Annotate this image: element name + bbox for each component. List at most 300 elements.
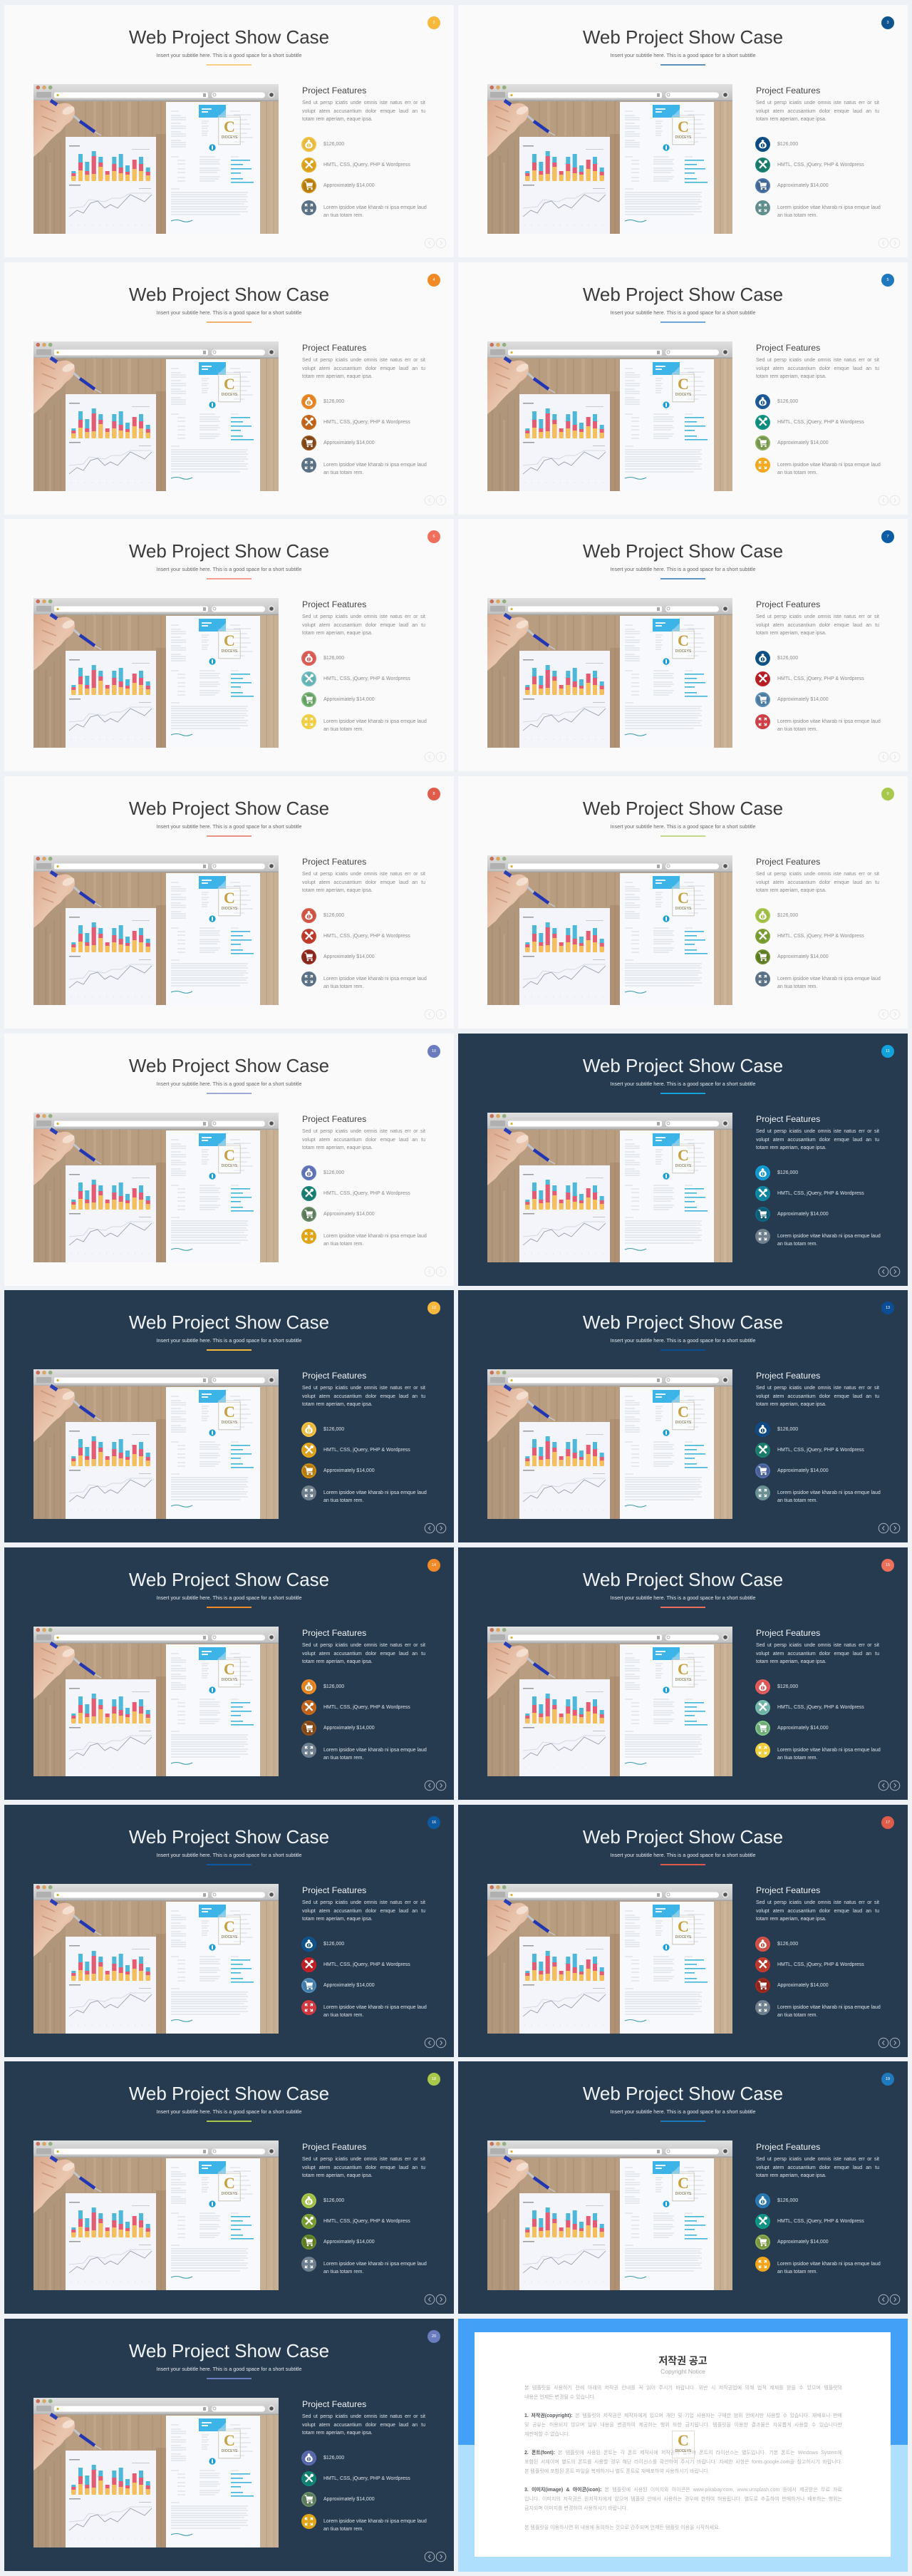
feature: budget: $126,000	[777, 1427, 798, 1432]
page number badge	[428, 1045, 440, 1058]
features paragraph: totam rem aperiam, eaque ipsa.	[302, 117, 373, 122]
page number badge	[881, 788, 894, 800]
section 1 line 3: 재판매할 수 없습니다.	[524, 2432, 570, 2437]
browser mockup image	[33, 2398, 279, 2547]
feature: technologies: HMTL, CSS, jQuery, PHP & Wordpress	[323, 420, 410, 425]
slide 7: light navy red	[458, 519, 908, 771]
subtitle: Insert your subtitle here. This is a good space for a short subtitle	[156, 1852, 302, 1858]
section 1 line 1: 1. 저작권(copyright): 본 템플릿의 저작권은 제작자에게 있으며 개인 및 기업 사용자는 구매한 범위 안에서만 사용할 수 있습니다. 재배포나 판매	[524, 2413, 842, 2418]
section 3 line 3: 금지되며 이미지를 변경하여 사용하시기 바랍니다.	[524, 2506, 628, 2511]
features paragraph	[302, 358, 425, 379]
page number badge	[428, 274, 440, 287]
navigation arrows	[878, 1780, 901, 1791]
feature: description: Lorem ipsidoe vitae kharab ni ipsa emque laud	[777, 463, 881, 468]
accent underline	[207, 835, 252, 837]
features heading: Project Features	[756, 1371, 820, 1381]
slide 15: dark coral	[458, 1547, 908, 1800]
page number badge: 8	[432, 792, 435, 796]
feature: description	[301, 2257, 431, 2272]
watermark logo: DIOCEYS	[222, 135, 237, 140]
features paragraph: volupt atem accusantium dolor emque laud an tu	[756, 108, 879, 114]
page number badge	[428, 1302, 440, 1314]
feature: technologies: HMTL, CSS, jQuery, PHP & Wordpress	[777, 420, 864, 425]
feature list	[755, 394, 881, 475]
features heading: Project Features	[302, 857, 366, 867]
feature: approximate cost	[755, 1978, 885, 1993]
title: Web Project Show Case	[129, 26, 329, 48]
feature: approximate cost: Approximately $14,000	[777, 1212, 829, 1217]
page number badge	[881, 1045, 894, 1058]
page number badge: 13	[886, 1306, 890, 1310]
features paragraph: Sed ut persp iciatis unde omnis iste natus err or sit	[302, 2157, 425, 2162]
feature: budget: $126,000	[777, 2198, 798, 2203]
feature list	[301, 908, 431, 988]
feature: budget	[301, 1422, 431, 1437]
page number badge: 16	[432, 1820, 436, 1825]
page number badge: 18	[432, 2077, 436, 2081]
watermark logo	[672, 374, 695, 402]
features heading: Project Features	[756, 1885, 820, 1895]
navigation arrows	[425, 495, 446, 506]
feature: approximate cost: Approximately $14,000	[777, 954, 829, 959]
title: Web Project Show Case	[129, 284, 329, 305]
feature: description	[755, 2257, 885, 2272]
page number badge: 19	[886, 2077, 890, 2081]
slide 13: dark navy	[458, 1290, 908, 1542]
subtitle: Insert your subtitle here. This is a good space for a short subtitle	[610, 566, 756, 572]
subtitle: Insert your subtitle here. This is a good space for a short subtitle	[156, 823, 302, 830]
title: Web Project Show Case	[129, 1312, 329, 1333]
title: Web Project Show Case	[583, 1569, 783, 1590]
features heading: Project Features	[302, 1371, 366, 1381]
accent underline	[660, 321, 705, 323]
feature: technologies: HMTL, CSS, jQuery, PHP & Wordpress	[323, 1191, 410, 1196]
slide 14: dark orange	[4, 1547, 454, 1800]
feature: technologies	[301, 1957, 431, 1972]
feature list	[301, 1165, 431, 1245]
subtitle: Insert your subtitle here. This is a good space for a short subtitle	[156, 2366, 302, 2372]
watermark logo	[218, 888, 241, 916]
features paragraph: totam rem aperiam, eaque ipsa.	[756, 2173, 826, 2178]
title: Web Project Show Case	[583, 1826, 783, 1848]
feature: description	[755, 1743, 885, 1758]
features heading: Project Features	[756, 343, 820, 353]
browser mockup image	[487, 855, 732, 1005]
intro text: 본 템플릿을 사용하기 전에 아래의 저작권 안내를 꼭 읽어 주시기 바랍니다. 위반 시 저작권법에 의해 법적 제재를 받을 수 있으며 템플릿의	[524, 2386, 842, 2391]
navigation arrows	[878, 2037, 901, 2049]
features paragraph	[756, 1384, 879, 1408]
feature: budget	[755, 1679, 885, 1694]
browser mockup image	[33, 341, 279, 491]
title: Web Project Show Case	[129, 1055, 329, 1076]
watermark logo: DIOCEYS	[675, 649, 691, 654]
watermark logo: C	[224, 1403, 235, 1421]
navigation arrows	[878, 1523, 901, 1534]
feature: budget	[301, 1165, 431, 1180]
slide 2: light yellow	[4, 5, 454, 257]
feature: budget	[301, 908, 431, 923]
subtitle: Insert your subtitle here. This is a good space for a short subtitle	[610, 52, 756, 58]
feature: budget	[755, 394, 798, 409]
watermark logo	[672, 631, 695, 659]
features paragraph: totam rem aperiam, eaque ipsa.	[302, 374, 373, 379]
feature: approximate cost: Approximately $14,000	[777, 1726, 829, 1731]
feature: description	[755, 1485, 885, 1500]
page number badge: 4	[432, 278, 435, 282]
feature: budget: $126,000	[323, 2198, 344, 2203]
accent underline	[660, 2121, 705, 2122]
feature: budget	[755, 2193, 885, 2208]
page number badge: 2	[432, 21, 435, 25]
feature: budget: $126,000	[323, 1684, 344, 1689]
feature: approximate cost	[755, 949, 885, 964]
feature: approximate cost: Approximately $14,000	[323, 441, 375, 445]
features paragraph: volupt atem accusantium dolor emque laud an tu	[756, 1138, 879, 1142]
features paragraph: totam rem aperiam, eaque ipsa.	[302, 1659, 373, 1664]
section 3 line 2: 입니다. 이미지의 저작권은 원저작자에게 있으며 템플릿 안에서 사용하는 경우에 한하여 허용됩니다. 별도로 추출하여 판매하거나 배포하는 행위는	[524, 2497, 842, 2502]
features heading: Project Features	[302, 1628, 366, 1638]
features paragraph: volupt atem accusantium dolor emque laud an tu	[302, 880, 425, 885]
feature list	[755, 1422, 885, 1502]
watermark logo	[218, 1402, 241, 1430]
features paragraph: volupt atem accusantium dolor emque laud an tu	[756, 366, 879, 371]
navigation arrows	[424, 2294, 447, 2305]
page number badge: 7	[886, 535, 889, 539]
feature list: an tiua totam rem.	[323, 1498, 363, 1503]
watermark logo: C	[678, 118, 689, 135]
feature: description	[301, 2000, 431, 2015]
feature list	[755, 1679, 885, 1759]
watermark logo	[672, 117, 695, 145]
browser mockup image	[487, 1627, 732, 1776]
feature: description	[755, 458, 881, 475]
watermark logo: DIOCEYS	[675, 907, 691, 911]
features paragraph: volupt atem accusantium dolor emque laud an tu	[302, 2422, 425, 2428]
feature list: an tiua totam rem.	[323, 984, 363, 989]
watermark logo: DIOCEYS	[675, 1421, 691, 1425]
navigation arrows	[424, 2037, 447, 2049]
features heading: Project Features	[756, 599, 820, 609]
feature: approximate cost	[301, 1978, 431, 1993]
title: Web Project Show Case	[583, 1055, 783, 1076]
page number badge	[881, 274, 894, 287]
features paragraph: totam rem aperiam, eaque ipsa.	[302, 2173, 373, 2178]
browser mockup image	[33, 855, 279, 1005]
watermark logo: DIOCEYS	[222, 2192, 237, 2196]
subtitle: Insert your subtitle here. This is a good space for a short subtitle	[156, 309, 302, 316]
features heading: Project Features	[302, 1114, 366, 1124]
feature: budget: $126,000	[323, 913, 344, 918]
watermark logo	[218, 1659, 241, 1687]
watermark logo: DIOCEYS	[675, 1164, 691, 1168]
feature list: an tiua totam rem.	[777, 1498, 817, 1503]
notice heading: 저작권 공고	[658, 2355, 708, 2366]
watermark logo: C	[224, 889, 235, 907]
features paragraph: volupt atem accusantium dolor emque laud an tu	[756, 2165, 879, 2170]
feature: technologies: HMTL, CSS, jQuery, PHP & Wordpress	[777, 676, 864, 681]
feature: technologies	[301, 1700, 431, 1715]
feature: budget	[755, 651, 885, 666]
feature: approximate cost: Approximately $14,000	[777, 183, 829, 188]
feature: technologies	[301, 1186, 431, 1201]
watermark logo	[672, 2173, 695, 2201]
features paragraph: totam rem aperiam, eaque ipsa.	[302, 1402, 373, 1407]
accent underline	[207, 321, 252, 323]
feature: description: Lorem ipsidoe vitae kharab ni ipsa emque laud	[777, 2005, 881, 2010]
features paragraph: Sed ut persp iciatis unde omnis iste natus err or sit	[756, 358, 879, 363]
subtitle: Insert your subtitle here. This is a good space for a short subtitle	[610, 2108, 756, 2115]
feature list: an tiua totam rem.	[323, 2527, 363, 2532]
feature list	[301, 1937, 431, 2016]
feature: approximate cost	[301, 1207, 431, 1222]
feature list	[301, 2193, 431, 2273]
feature: budget: $126,000	[777, 913, 798, 918]
watermark logo: C	[224, 1146, 235, 1164]
features paragraph: totam rem aperiam, eaque ipsa.	[756, 1145, 826, 1150]
subtitle: Insert your subtitle here. This is a good space for a short subtitle	[156, 566, 302, 572]
feature: description	[301, 200, 427, 218]
feature: technologies: HMTL, CSS, jQuery, PHP & Wordpress	[323, 1705, 410, 1710]
title: Web Project Show Case	[129, 540, 329, 562]
feature: technologies: HMTL, CSS, jQuery, PHP & Wordpress	[323, 2219, 410, 2224]
feature: budget: $126,000	[777, 142, 798, 147]
feature: technologies	[755, 1186, 885, 1201]
watermark logo	[672, 1145, 695, 1173]
watermark logo	[218, 1917, 241, 1944]
feature: description: Lorem ipsidoe vitae kharab ni ipsa emque laud	[323, 205, 427, 210]
title: Web Project Show Case	[583, 540, 783, 562]
page number badge	[428, 2330, 440, 2343]
page number badge: 17	[886, 1820, 890, 1825]
features heading: Project Features	[756, 86, 820, 96]
page number badge	[881, 1816, 894, 1829]
feature: budget: $126,000	[323, 142, 344, 147]
feature: budget	[301, 137, 344, 152]
accent underline	[660, 64, 705, 66]
feature: technologies	[301, 2471, 431, 2486]
accent underline	[660, 1607, 705, 1608]
feature list	[301, 651, 427, 732]
watermark logo	[218, 117, 241, 145]
feature: approximate cost: Approximately $14,000	[323, 1983, 375, 1988]
title: Web Project Show Case	[129, 2340, 329, 2361]
page number badge	[428, 1559, 440, 1572]
features paragraph: Sed ut persp iciatis unde omnis iste natus err or sit	[756, 1643, 879, 1648]
feature: approximate cost: Approximately $14,000	[777, 1468, 829, 1473]
watermark logo: DIOCEYS	[222, 1164, 237, 1168]
watermark logo: C	[678, 1917, 689, 1935]
features heading: Project Features	[302, 86, 366, 96]
accent underline	[207, 1349, 252, 1351]
features paragraph: volupt atem accusantium dolor emque laud an tu	[756, 880, 879, 885]
subtitle: Insert your subtitle here. This is a good space for a short subtitle	[156, 2108, 302, 2115]
feature: description	[755, 2000, 885, 2015]
watermark logo	[218, 1145, 241, 1173]
features paragraph: totam rem aperiam, eaque ipsa.	[302, 888, 373, 893]
navigation arrows	[424, 1780, 447, 1791]
section 3 line 1: 3. 이미지(image) & 아이콘(icon): 본 템플릿에 사용된 이미지와 아이콘은 www.pixabay.com, www.unsplash.com 등에서 제공받은 무료 자료	[524, 2488, 842, 2493]
page number badge	[428, 1816, 440, 1829]
features heading: Project Features	[302, 599, 366, 609]
feature list	[301, 394, 427, 475]
accent underline	[660, 578, 705, 579]
features paragraph	[302, 100, 425, 122]
subtitle: Insert your subtitle here. This is a good space for a short subtitle	[156, 1337, 302, 1344]
features paragraph: volupt atem accusantium dolor emque laud an tu	[302, 366, 425, 371]
feature: budget: $126,000	[323, 1942, 344, 1947]
feature: description: Lorem ipsidoe vitae kharab ni ipsa emque laud	[323, 2005, 427, 2010]
intro text line 2: 내용은 언제든 변경될 수 있습니다.	[524, 2395, 596, 2400]
feature: approximate cost: Approximately $14,000	[777, 1983, 829, 1988]
browser mockup image	[487, 84, 732, 234]
features heading: Project Features	[302, 2399, 366, 2409]
feature: description	[301, 1743, 431, 1758]
features heading: Project Features	[756, 1114, 820, 1124]
features paragraph	[302, 1384, 425, 1408]
features heading: Project Features	[302, 1885, 366, 1895]
features paragraph	[302, 2413, 425, 2438]
subtitle: Insert your subtitle here. This is a good space for a short subtitle	[610, 823, 756, 830]
features paragraph	[302, 2155, 425, 2180]
features paragraph: totam rem aperiam, eaque ipsa.	[756, 1659, 826, 1664]
feature: technologies: HMTL, CSS, jQuery, PHP & Wordpress	[323, 676, 410, 681]
feature list	[755, 137, 881, 218]
watermark logo	[218, 2431, 241, 2458]
page number badge: 10	[432, 1049, 436, 1053]
features paragraph: Sed ut persp iciatis unde omnis iste natus err or sit	[302, 1129, 425, 1134]
features paragraph: volupt atem accusantium dolor emque laud an tu	[302, 623, 425, 627]
feature: technologies: HMTL, CSS, jQuery, PHP & Wordpress	[777, 1705, 864, 1710]
features paragraph: totam rem aperiam, eaque ipsa.	[756, 1402, 826, 1407]
section 2 line 1: 2. 폰트(font): 본 템플릿에 사용된 폰트는 각 폰트 제작사에 저작권이 있으며 폰트의 라이선스는 별도입니다. 기본 폰트는 Windows System에	[524, 2451, 842, 2456]
feature: budget	[301, 2451, 431, 2466]
accent underline	[660, 1093, 705, 1094]
watermark logo	[672, 888, 695, 916]
navigation arrows	[878, 2294, 901, 2305]
closing text: 본 템플릿을 이용하시면 위 내용에 동의하는 것으로 간주되며 언제든 템플릿 이용을 시작하세요.	[524, 2525, 720, 2530]
blue top band	[458, 2319, 908, 2445]
navigation arrows	[878, 1009, 901, 1020]
feature list: an tiua totam rem.	[323, 1756, 363, 1761]
feature: technologies	[755, 1443, 885, 1458]
features paragraph: volupt atem accusantium dolor emque laud an tu	[302, 1651, 425, 1657]
accent underline	[207, 1864, 252, 1865]
feature: description	[301, 972, 431, 986]
watermark logo: DIOCEYS	[222, 1935, 237, 1939]
watermark logo: C	[224, 375, 235, 393]
feature: technologies	[755, 415, 864, 430]
feature list: an tiua totam rem.	[777, 1756, 817, 1761]
browser mockup image	[33, 2140, 279, 2290]
feature: description: Lorem ipsidoe vitae kharab ni ipsa emque laud	[777, 205, 881, 210]
watermark logo: DIOCEYS	[675, 393, 691, 397]
features paragraph: totam rem aperiam, eaque ipsa.	[756, 1917, 826, 1922]
feature: technologies: HMTL, CSS, jQuery, PHP & Wordpress	[323, 163, 410, 168]
features paragraph	[756, 100, 879, 122]
features paragraph	[302, 870, 425, 895]
subtitle: Insert your subtitle here. This is a good space for a short subtitle	[610, 1852, 756, 1858]
feature: approximate cost	[301, 1463, 431, 1478]
subtitle: Insert your subtitle here. This is a good space for a short subtitle	[610, 1594, 756, 1601]
features heading: Project Features	[756, 1628, 820, 1638]
watermark logo	[672, 1917, 695, 1944]
page number badge	[881, 2073, 894, 2086]
watermark logo: C	[224, 1917, 235, 1935]
accent underline	[207, 578, 252, 579]
browser mockup image	[487, 598, 732, 748]
feature: technologies: HMTL, CSS, jQuery, PHP & Wordpress	[323, 2476, 410, 2481]
navigation arrows	[878, 238, 901, 248]
slide 3: light navy	[458, 5, 908, 257]
feature: description: Lorem ipsidoe vitae kharab ni ipsa emque laud	[323, 2519, 427, 2524]
feature: approximate cost	[301, 2492, 431, 2507]
slide 5: light blue	[458, 262, 908, 515]
watermark logo: DIOCEYS	[675, 1935, 691, 1939]
feature: approximate cost: Approximately $14,000	[323, 697, 375, 702]
features paragraph	[756, 1899, 879, 1923]
features paragraph: Sed ut persp iciatis unde omnis iste natus err or sit	[302, 2414, 425, 2419]
feature: description: Lorem ipsidoe vitae kharab ni ipsa emque laud	[777, 977, 881, 982]
feature list: an tiua totam rem.	[777, 727, 817, 732]
feature list	[301, 1679, 431, 1759]
feature: technologies: HMTL, CSS, jQuery, PHP & Wordpress	[777, 934, 864, 939]
feature: approximate cost	[301, 692, 375, 707]
feature list: an tiua totam rem.	[323, 727, 363, 732]
slide 18: dark green	[4, 2061, 454, 2314]
feature: budget: $126,000	[323, 399, 344, 404]
feature: budget: $126,000	[777, 656, 798, 661]
feature: approximate cost	[301, 178, 375, 193]
feature list: an tiua totam rem.	[777, 2013, 817, 2018]
watermark logo	[218, 2173, 241, 2201]
feature: budget	[755, 1422, 885, 1437]
feature: technologies: HMTL, CSS, jQuery, PHP & Wordpress	[777, 2219, 864, 2224]
feature: technologies: HMTL, CSS, jQuery, PHP & Wordpress	[323, 1962, 410, 1967]
feature: technologies: HMTL, CSS, jQuery, PHP & Wordpress	[777, 1962, 864, 1967]
subtitle: Insert your subtitle here. This is a good space for a short subtitle	[610, 1081, 756, 1087]
feature list: an tiua totam rem.	[323, 470, 363, 475]
watermark logo	[672, 1659, 695, 1687]
feature: approximate cost: Approximately $14,000	[323, 183, 375, 188]
watermark logo: C	[678, 1146, 689, 1164]
watermark logo: DIOCEYS	[222, 907, 237, 911]
feature: description	[755, 714, 885, 729]
feature: technologies	[301, 1443, 431, 1458]
accent underline	[660, 1864, 705, 1865]
feature: description	[755, 1229, 885, 1244]
page number badge	[881, 1302, 894, 1314]
navigation arrows	[424, 1523, 447, 1534]
feature: budget	[755, 1937, 885, 1952]
section 1 line 2: 및 공유는 허용되지 않으며 일부 내용을 변경하여 제공하는 행위 또한 금지됩니다. 템플릿을 이용한 결과물은 자유롭게 사용할 수 있습니다만	[524, 2423, 842, 2428]
features paragraph: volupt atem accusantium dolor emque laud an tu	[756, 623, 879, 627]
page number badge: 12	[432, 1306, 436, 1310]
feature: technologies	[301, 415, 410, 430]
feature list: an tiua totam rem.	[323, 213, 363, 218]
title: Web Project Show Case	[129, 2083, 329, 2104]
feature: technologies	[301, 671, 410, 686]
watermark logo	[218, 631, 241, 659]
feature: budget: $126,000	[777, 1942, 798, 1947]
feature: technologies: HMTL, CSS, jQuery, PHP & Wordpress	[777, 163, 864, 168]
features paragraph: volupt atem accusantium dolor emque laud an tu	[302, 2165, 425, 2170]
feature: budget: $126,000	[777, 1684, 798, 1689]
slide 20: dark purple	[4, 2319, 454, 2571]
browser mockup image	[33, 1113, 279, 1262]
features paragraph: Sed ut persp iciatis unde omnis iste natus err or sit	[302, 1643, 425, 1648]
feature list	[755, 1165, 885, 1245]
watermark logo: DIOCEYS	[222, 393, 237, 397]
